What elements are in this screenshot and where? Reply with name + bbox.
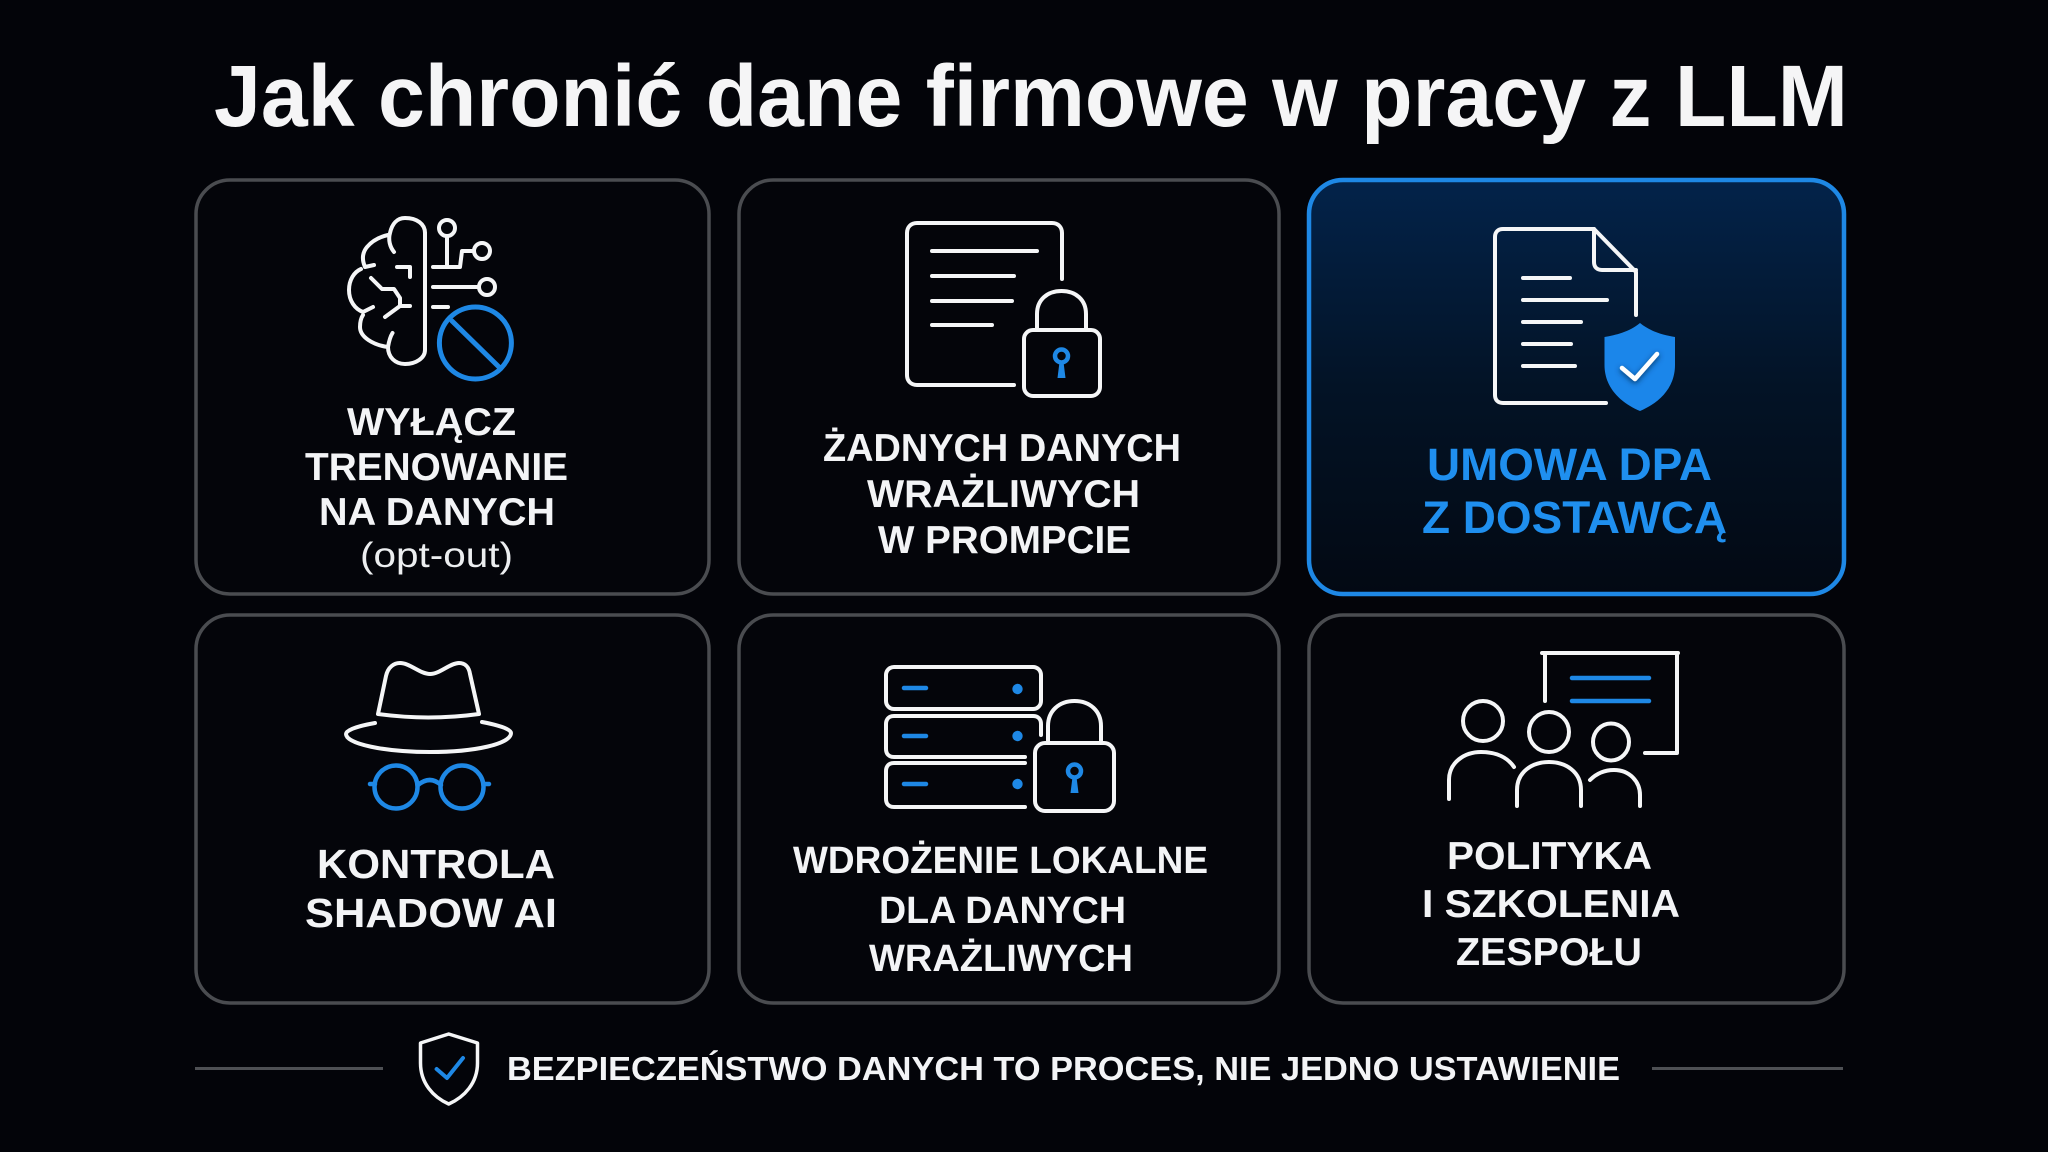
icon: shield with check [420, 1034, 478, 1104]
circuit traces [433, 220, 495, 307]
hat [346, 663, 511, 752]
padlock [1024, 291, 1100, 396]
icon: document with padlock [907, 223, 1100, 396]
label [1422, 835, 1680, 974]
label: WRAŻLIWYCH [869, 938, 1133, 980]
keyhole [1055, 350, 1068, 378]
label [1422, 439, 1727, 543]
board lines [1572, 678, 1649, 701]
icon: server rack with padlock [886, 667, 1114, 811]
check mark [1622, 354, 1657, 379]
people [1449, 701, 1640, 806]
label: SHADOW AI [305, 890, 557, 936]
label: POLITYKA [1447, 835, 1652, 878]
label [305, 401, 568, 575]
server indicators [904, 684, 1023, 789]
label: WDROŻENIE LOKALNE [793, 840, 1208, 882]
shield [1604, 323, 1675, 411]
label: W PROMPCIE [878, 519, 1131, 562]
footer [195, 1034, 1843, 1104]
presentation board [1542, 653, 1678, 753]
keyhole [1068, 764, 1081, 793]
document [907, 223, 1062, 385]
footer message: BEZPIECZEŃSTWO DANYCH TO PROCES, NIE JEDNO USTAWIENIE [507, 1050, 1620, 1087]
label: (opt-out) [360, 536, 513, 575]
label [305, 841, 557, 936]
card frame [739, 615, 1279, 1003]
card frame [196, 615, 709, 1003]
label: KONTROLA [317, 841, 555, 887]
label: TRENOWANIE [305, 446, 568, 489]
glasses [370, 766, 489, 808]
document [1495, 229, 1636, 403]
title: Jak chronić dane firmowe w pracy z LLM [214, 48, 1848, 145]
label: I SZKOLENIA [1422, 883, 1680, 926]
card frame [1309, 615, 1844, 1003]
icon: team with presentation board [1449, 653, 1678, 806]
icon: contract with shield [1495, 229, 1675, 411]
card frame [196, 180, 709, 594]
label: ZESPOŁU [1456, 931, 1642, 974]
label [793, 840, 1208, 980]
label: Z DOSTAWCĄ [1422, 492, 1727, 543]
label: ŻADNYCH DANYCH [823, 427, 1181, 470]
right rule [1652, 1067, 1843, 1070]
label: WRAŻLIWYCH [867, 473, 1140, 516]
panel: kontrola shadow ai [196, 615, 709, 1003]
label [823, 427, 1181, 562]
label: WYŁĄCZ [347, 401, 516, 444]
panel: wdrożenie lokalne [739, 615, 1279, 1003]
left rule [195, 1067, 383, 1070]
label: NA DANYCH [319, 491, 555, 534]
card frame [739, 180, 1279, 594]
padlock [1035, 701, 1114, 811]
icon: hat and glasses [346, 663, 511, 808]
card frame [1309, 180, 1844, 594]
panel: umowa dpa (highlighted) [1309, 180, 1844, 594]
brain outline [349, 218, 425, 364]
label: UMOWA DPA [1427, 439, 1712, 490]
panel: polityka i szkolenia [1309, 615, 1844, 1003]
panel: żadnych danych wrażliwych [739, 180, 1279, 594]
label: DLA DANYCH [879, 890, 1126, 932]
icon: brain with circuit and prohibition sign [349, 218, 511, 379]
server units [886, 667, 1041, 807]
panel: wyłącz trenowanie [196, 180, 709, 594]
prohibition sign [439, 307, 511, 379]
